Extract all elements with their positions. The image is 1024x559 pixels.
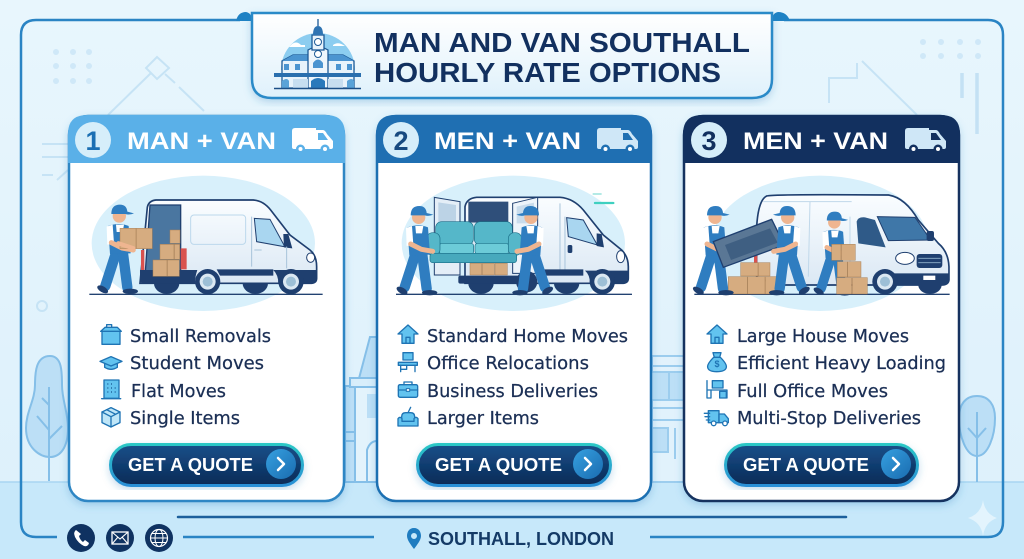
- footer divider: [178, 516, 846, 518]
- item: full office moves: Full Office Moves: [737, 382, 888, 402]
- icon: email: [106, 524, 134, 552]
- button: get a quote: GET A QUOTE: [435, 455, 562, 475]
- heading: men + van: 2: [393, 126, 409, 156]
- item: multi-stop deliveries: Multi-Stop Deliveries: [737, 409, 921, 429]
- item: large house moves: Large House Moves: [737, 327, 909, 347]
- heading: men + van: MEN + VAN: [434, 128, 581, 155]
- icon: map pin: [407, 528, 421, 549]
- button: get a quote: [418, 444, 610, 486]
- feature list: [100, 325, 271, 429]
- sparkle decoration: [968, 500, 997, 536]
- icon: globe: [145, 524, 173, 552]
- item: efficient heavy loading: Efficient Heavy Loading: [737, 354, 946, 374]
- item: standard home moves: Standard Home Moves: [427, 327, 628, 347]
- illustration: man loading van: [89, 176, 323, 311]
- feature list: [398, 325, 628, 429]
- heading: men + van: [383, 122, 581, 158]
- button: get a quote: [726, 444, 918, 486]
- icon: van: [292, 128, 333, 154]
- footer contact icons: [67, 524, 173, 552]
- button: get a quote: [110, 444, 302, 486]
- illustration: three men loading large van: [692, 176, 950, 311]
- item: student moves: Student Moves: [130, 354, 264, 374]
- button: get a quote: GET A QUOTE: [128, 455, 253, 475]
- location text: SOUTHALL, LONDON: [428, 529, 614, 549]
- title text: MAN AND VAN SOUTHALL: [374, 27, 750, 58]
- heading: man + van: 1: [85, 126, 101, 156]
- item: flat moves: [102, 380, 226, 402]
- item: single items: Single Items: [130, 409, 240, 429]
- item: office relocations: Office Relocations: [427, 354, 589, 374]
- panel: 2 men + van: [376, 115, 652, 501]
- heading: men + van: 3: [701, 126, 717, 156]
- icon: Southall town hall: [274, 19, 361, 88]
- heading: man + van: MAN + VAN: [127, 128, 276, 155]
- button: get a quote: GET A QUOTE: [743, 455, 869, 475]
- heading: men + van: MEN + VAN: [743, 128, 888, 155]
- item: flat moves: Flat Moves: [131, 382, 226, 402]
- footer location: [407, 528, 614, 549]
- item: larger items: Larger Items: [427, 409, 539, 429]
- icon: phone: [67, 524, 95, 552]
- illustration: two men carrying sofa: [395, 176, 632, 311]
- title text: HOURLY RATE OPTIONS: [374, 57, 721, 88]
- feature list: [704, 325, 946, 429]
- item: business deliveries: Business Deliveries: [427, 382, 598, 402]
- heading: men + van: [691, 122, 888, 158]
- title banner: [236, 12, 790, 98]
- title text: [374, 27, 750, 88]
- heading: man + van: [75, 122, 276, 158]
- item: efficient heavy loading: $: [714, 359, 720, 369]
- item: small removals: Small Removals: [130, 327, 271, 347]
- panel: 3 men + van: [683, 115, 960, 501]
- icon: van: [905, 128, 946, 154]
- panel: 1 man + van: [68, 115, 345, 501]
- icon: van: [597, 128, 638, 154]
